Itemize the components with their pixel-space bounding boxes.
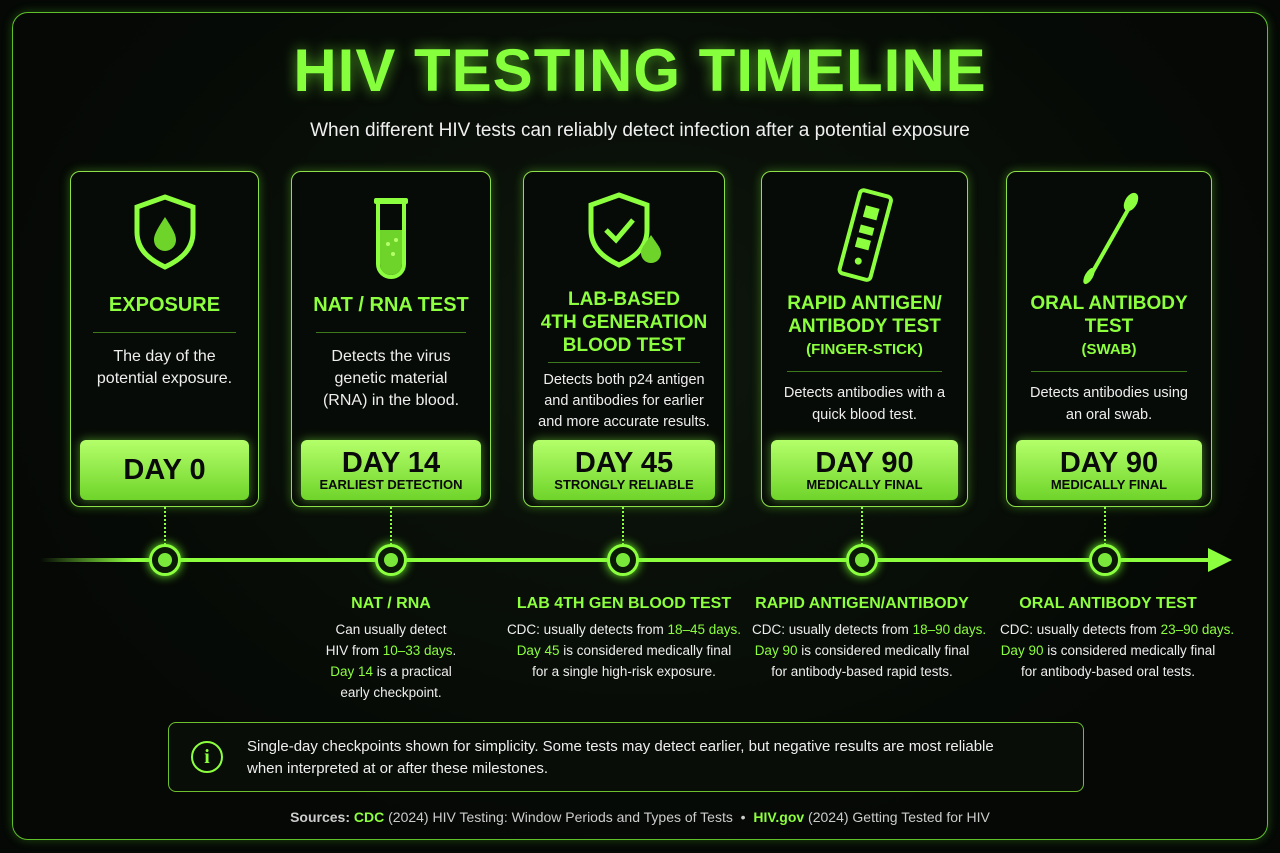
day badge bbox=[80, 440, 249, 500]
subtitle: When different HIV tests can reliably detect infection after a potential exposure bbox=[310, 120, 970, 141]
note: NAT: early checkpoint. bbox=[340, 685, 442, 700]
card: NAT bbox=[291, 171, 491, 507]
info callout: Single-day checkpoints shown for simplicity. Some tests may detect earlier, but negative results are most reliable bbox=[247, 738, 994, 755]
day badge: DAY 45 bbox=[575, 447, 673, 479]
card: oral: Detects antibodies using bbox=[1030, 385, 1188, 401]
note: rapid: CDC: usually detects from 18–90 days. bbox=[752, 622, 986, 637]
icon: info: i bbox=[204, 746, 210, 768]
icon: shield check bbox=[588, 192, 661, 268]
icon: info bbox=[191, 741, 223, 773]
note: lab: Day 45 is considered medically final bbox=[517, 643, 731, 658]
card: lab 4th gen: and antibodies for earlier bbox=[544, 393, 704, 409]
note: oral: ORAL ANTIBODY TEST bbox=[1019, 595, 1197, 612]
card: rapid: quick blood test. bbox=[812, 407, 917, 423]
card: NAT: Detects the virus bbox=[331, 348, 451, 365]
day badge: DAY 0 bbox=[123, 454, 206, 486]
day badge bbox=[771, 440, 958, 500]
card: lab 4th gen: BLOOD TEST bbox=[563, 335, 685, 356]
note: NAT: Can usually detect bbox=[335, 622, 447, 637]
card: exposure: potential exposure. bbox=[97, 370, 232, 387]
card: rapid bbox=[761, 171, 968, 507]
card: oral: an oral swab. bbox=[1066, 407, 1152, 423]
card: rapid: ANTIBODY TEST bbox=[788, 316, 941, 337]
card: oral bbox=[1006, 171, 1212, 507]
card: lab 4th gen: 4TH GENERATION bbox=[541, 312, 707, 333]
day badge: MEDICALLY FINAL bbox=[806, 477, 923, 492]
card: lab 4th gen: Detects both p24 antigen bbox=[543, 372, 705, 388]
note: rapid: for antibody-based rapid tests. bbox=[771, 664, 953, 679]
note: rapid bbox=[752, 595, 986, 679]
note: lab bbox=[507, 595, 741, 679]
card: lab 4th gen: and more accurate results. bbox=[538, 414, 710, 430]
card: lab 4th gen bbox=[523, 171, 725, 507]
info callout: when interpreted at or after these milestones. bbox=[247, 760, 548, 777]
card: exposure: EXPOSURE bbox=[109, 294, 220, 316]
icon: shield drop bbox=[134, 194, 196, 270]
card: exposure: The day of the bbox=[113, 348, 216, 365]
icon: test tube bbox=[374, 198, 408, 279]
day badge bbox=[1016, 440, 1202, 500]
note: lab: CDC: usually detects from 18–45 days. bbox=[507, 622, 741, 637]
card: exposure bbox=[70, 171, 259, 507]
card: rapid: Detects antibodies with a bbox=[784, 385, 945, 401]
day badge: DAY 90 bbox=[1060, 447, 1158, 479]
card: NAT: NAT / RNA TEST bbox=[313, 294, 469, 316]
note: NAT: Day 14 is a practical bbox=[330, 664, 452, 679]
timeline arrow bbox=[43, 548, 1232, 572]
note: rapid: Day 90 is considered medically final bbox=[755, 643, 969, 658]
card: rapid: RAPID ANTIGEN/ bbox=[787, 293, 942, 314]
note: lab: for a single high-risk exposure. bbox=[532, 664, 716, 679]
card: oral: TEST bbox=[1085, 316, 1133, 337]
icon: swab bbox=[1083, 192, 1138, 284]
day badge: MEDICALLY FINAL bbox=[1051, 477, 1167, 492]
card: oral: ORAL ANTIBODY bbox=[1030, 293, 1188, 314]
note: oral: CDC: usually detects from 23–90 days. bbox=[1000, 622, 1234, 637]
icon: rapid test cassette bbox=[838, 188, 893, 282]
day badge bbox=[533, 440, 715, 500]
info callout bbox=[168, 722, 1084, 792]
day badge: DAY 14 bbox=[342, 447, 440, 479]
note: NAT: HIV from 10–33 days. bbox=[326, 643, 456, 658]
note: NAT: NAT / RNA bbox=[351, 595, 431, 612]
title: HIV TESTING TIMELINE bbox=[293, 37, 987, 104]
note: NAT bbox=[326, 595, 456, 700]
card: rapid: (FINGER-STICK) bbox=[806, 341, 923, 358]
card: NAT: genetic material bbox=[335, 370, 447, 387]
note: oral bbox=[1000, 595, 1234, 679]
day badge: EARLIEST DETECTION bbox=[319, 477, 462, 492]
day badge: STRONGLY RELIABLE bbox=[554, 477, 694, 492]
day badge: DAY 90 bbox=[815, 447, 914, 479]
card: lab 4th gen: LAB-BASED bbox=[568, 289, 680, 310]
day badge bbox=[301, 440, 481, 500]
card: NAT: (RNA) in the blood. bbox=[323, 392, 459, 409]
note: rapid: RAPID ANTIGEN/ANTIBODY bbox=[755, 595, 969, 612]
note: oral: Day 90 is considered medically final bbox=[1001, 643, 1215, 658]
sources: Sources: CDC (2024) HIV Testing: Window Periods and Types of Tests • HIV.gov (2024) Getting Tested for HIV bbox=[290, 809, 990, 825]
note: lab: LAB 4TH GEN BLOOD TEST bbox=[517, 595, 731, 612]
note: oral: for antibody-based oral tests. bbox=[1021, 664, 1195, 679]
card: oral: (SWAB) bbox=[1082, 341, 1136, 358]
timeline nodes bbox=[149, 544, 181, 576]
